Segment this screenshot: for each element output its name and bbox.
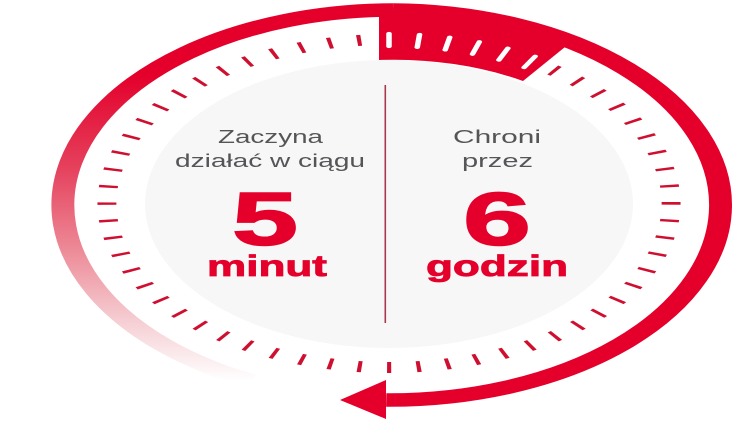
right text block: 6	[463, 177, 531, 261]
white ticks in wedge	[389, 34, 535, 68]
left text block: Zaczyna	[218, 126, 324, 147]
outer ring: solid section	[386, 10, 721, 400]
right text block	[426, 126, 568, 283]
red minute ticks	[107, 40, 671, 368]
right text block: przez	[462, 150, 533, 171]
arrow head	[340, 380, 386, 419]
left text block	[175, 126, 365, 283]
centre divider	[384, 85, 386, 323]
left text block: 5	[232, 177, 298, 261]
right text block: Chroni	[453, 126, 541, 147]
outer ring: fading section	[63, 10, 393, 381]
right text block: godzin	[426, 250, 568, 283]
highlighted red 5-minute wedge	[379, 16, 565, 81]
left text block: działać w ciągu	[175, 150, 365, 171]
left text block: minut	[207, 250, 327, 283]
inner grey dial face	[145, 60, 633, 348]
